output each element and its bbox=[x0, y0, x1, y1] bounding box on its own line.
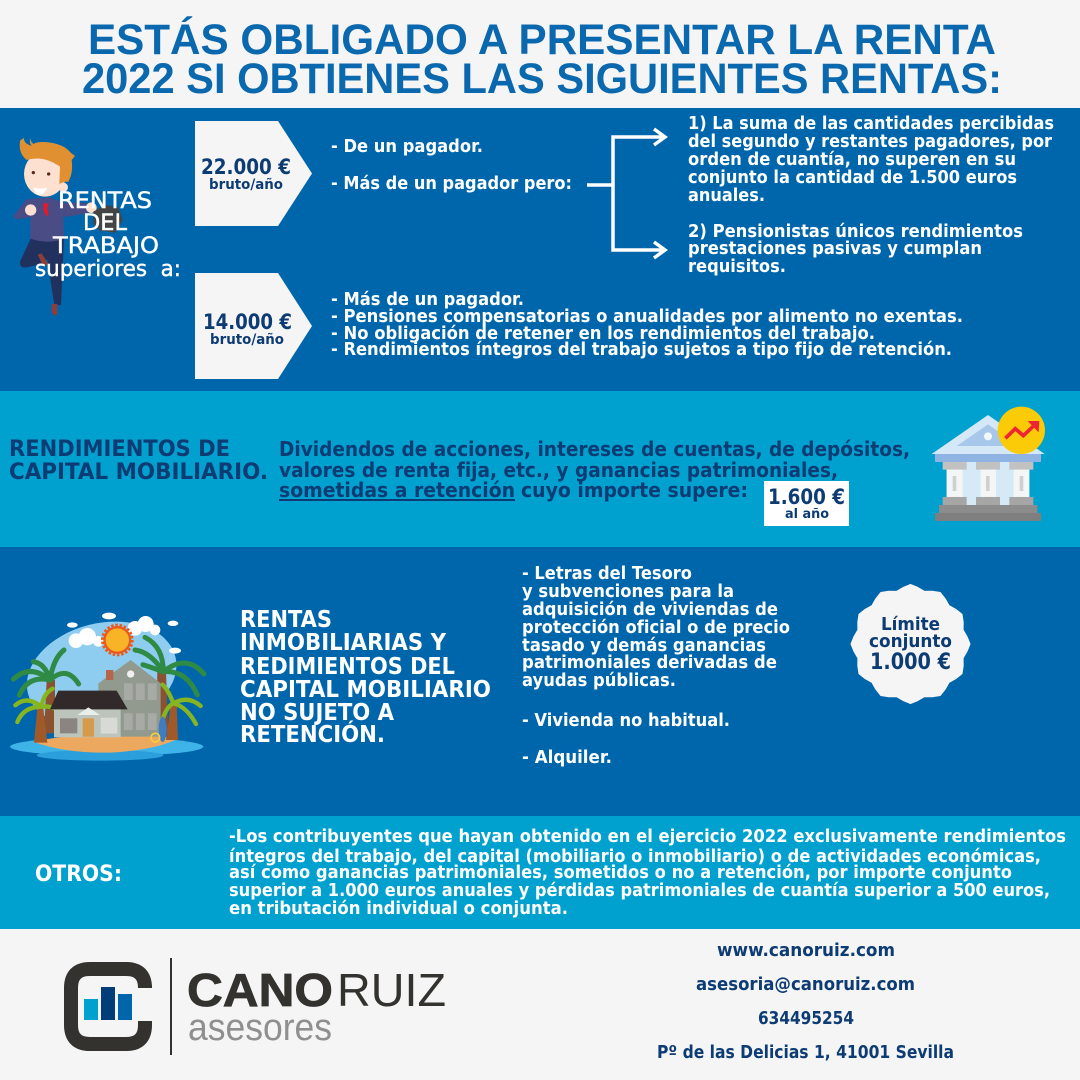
text: letras y alquiler list: y subvenciones para la bbox=[522, 582, 734, 602]
text: condition 2: requisitos. bbox=[688, 257, 786, 277]
heading: otros: OTROS: bbox=[35, 862, 122, 887]
pentagon: 14.000 €: bruto/año bbox=[210, 332, 284, 348]
text: condition 1: orden de cuantía, no superen en su bbox=[688, 150, 1016, 170]
text: dividendos: sometidas a retención bbox=[279, 478, 515, 502]
text: letras y alquiler list: protección oficial o de precio bbox=[522, 618, 790, 638]
text: otros detail: en tributación individual o conjunta. bbox=[229, 899, 568, 919]
text: contact details: www.canoruiz.com bbox=[717, 941, 895, 961]
text: condition 2 bbox=[688, 222, 1023, 277]
text: condition 1: 1) La suma de las cantidades percibidas bbox=[688, 114, 1054, 134]
text: letras y alquiler list: - Alquiler. bbox=[522, 748, 612, 768]
heading: capital mobiliario: CAPITAL MOBILIARIO. bbox=[9, 460, 268, 485]
text: rentas del trabajo: superiores a: bbox=[35, 257, 181, 282]
logo: Cano Ruiz asesores bbox=[71, 958, 446, 1055]
text: 14.000 list: - Más de un pagador. bbox=[331, 290, 524, 310]
title: 2022 SI OBTIENES LAS SIGUIENTES RENTAS: bbox=[82, 55, 1002, 103]
panel: capital mobiliario bbox=[0, 391, 1080, 547]
text: contact details: 634495254 bbox=[758, 1009, 854, 1029]
text: rentas del trabajo: RENTAS bbox=[58, 189, 152, 214]
pentagon: 22.000 € bbox=[195, 121, 312, 226]
title bbox=[82, 16, 1002, 103]
text: letras y alquiler list: - Letras del Tesoro bbox=[522, 564, 692, 584]
text: letras y alquiler list: adquisición de viviendas de bbox=[522, 600, 778, 620]
title: ESTÁS OBLIGADO A PRESENTAR LA RENTA bbox=[88, 16, 996, 64]
text: 14.000 list: - Rendimientos íntegros del trabajo sujetos a tipo fijo de retención. bbox=[331, 340, 952, 360]
pentagon: 22.000 €: 22.000 € bbox=[201, 155, 291, 179]
text: contact details: Pº de las Delicias 1, 41001 Sevilla bbox=[657, 1043, 954, 1063]
box: 1.600 € al año bbox=[764, 481, 849, 526]
text: rentas del trabajo bbox=[35, 189, 181, 282]
text: 14.000 list bbox=[331, 290, 963, 360]
text: otros detail: así como ganancias patrimoniales, sometidos o no a retención, por importe conjunto bbox=[229, 863, 1012, 883]
heading: capital mobiliario bbox=[9, 437, 268, 485]
heading: rentas inmobiliarias: RETENCIÓN. bbox=[240, 720, 385, 748]
arrow: branching bracket bbox=[587, 129, 665, 258]
heading: capital mobiliario: RENDIMIENTOS DE bbox=[9, 437, 230, 462]
text: condition 1 bbox=[688, 114, 1054, 206]
text: condition 2: prestaciones pasivas y cumplan bbox=[688, 239, 982, 259]
badge: límite conjunto: Límite bbox=[881, 615, 940, 635]
text: pagadores bbox=[331, 137, 572, 194]
text: dividendos: valores de renta fija, etc., y ganancias patrimoniales, bbox=[279, 458, 838, 482]
text: letras y alquiler list: patrimoniales derivadas de bbox=[522, 653, 777, 673]
text: condition 2: 2) Pensionistas únicos rendimientos bbox=[688, 222, 1023, 242]
text: condition 1: del segundo y restantes pagadores, por bbox=[688, 132, 1052, 152]
text: otros detail bbox=[229, 827, 1066, 919]
text: dividendos: cuyo importe supere: bbox=[521, 478, 748, 502]
text: 14.000 list: - Pensiones compensatorias o anualidades por alimento no exentas. bbox=[331, 307, 963, 327]
text: letras y alquiler list: - Vivienda no habitual. bbox=[522, 711, 730, 731]
pentagon: 22.000 €: bruto/año bbox=[209, 177, 283, 193]
panel: otros bbox=[0, 816, 1080, 929]
badge: límite conjunto: 1.000 € bbox=[870, 650, 951, 675]
logo: Cano Ruiz asesores: CANO bbox=[187, 964, 333, 1016]
text: dividendos: Dividendos de acciones, intereses de cuentas, de depósitos, bbox=[279, 437, 910, 461]
heading: rentas inmobiliarias: REDIMIENTOS DEL bbox=[240, 652, 455, 680]
text: 14.000 list: - No obligación de retener en los rendimientos del trabajo. bbox=[331, 324, 875, 344]
box: 1.600 € al año: al año bbox=[785, 506, 829, 522]
pentagon: 14.000 €: 14.000 € bbox=[203, 310, 292, 334]
panel: rentas inmobiliarias bbox=[0, 547, 1080, 816]
text: letras y alquiler list: tasado y demás ganancias bbox=[522, 636, 766, 656]
text: contact details: asesoria@canoruiz.com bbox=[696, 975, 915, 995]
logo: Cano Ruiz asesores: RUIZ bbox=[337, 964, 446, 1016]
text: condition 1: anuales. bbox=[688, 186, 765, 206]
text: contact details bbox=[657, 941, 954, 1063]
heading: rentas inmobiliarias bbox=[240, 605, 491, 748]
panel: rentas del trabajo bbox=[0, 108, 1080, 391]
heading: rentas inmobiliarias: NO SUJETO A bbox=[240, 698, 395, 726]
icon: island house bbox=[10, 606, 204, 761]
text: letras y alquiler list: ayudas públicas. bbox=[522, 671, 676, 691]
logo: Cano Ruiz asesores: asesores bbox=[188, 1007, 332, 1049]
badge: límite conjunto: conjunto bbox=[869, 632, 952, 652]
text: rentas del trabajo: DEL bbox=[83, 211, 128, 236]
text: pagadores: - De un pagador. bbox=[331, 137, 483, 157]
pentagon: 14.000 € bbox=[195, 273, 312, 379]
badge: límite conjunto bbox=[851, 584, 970, 704]
heading: rentas inmobiliarias: CAPITAL MOBILIARIO bbox=[240, 675, 491, 703]
text: letras y alquiler list bbox=[522, 564, 790, 768]
icon: businessman bbox=[13, 138, 123, 316]
icon: bank with growth bbox=[932, 407, 1045, 521]
text: dividendos bbox=[279, 437, 910, 502]
heading: rentas inmobiliarias: RENTAS bbox=[240, 605, 332, 633]
heading: rentas inmobiliarias: INMOBILIARIAS Y bbox=[240, 628, 447, 656]
text: rentas del trabajo: TRABAJO bbox=[52, 234, 159, 259]
text: condition 1: conjunto la cantidad de 1.500 euros bbox=[688, 168, 1017, 188]
text: pagadores: - Más de un pagador pero: bbox=[331, 174, 572, 194]
box: 1.600 € al año: 1.600 € bbox=[768, 485, 845, 509]
text: otros detail: íntegros del trabajo, del capital (mobiliario o inmobiliario) o de actividades económicas, bbox=[229, 847, 1041, 867]
